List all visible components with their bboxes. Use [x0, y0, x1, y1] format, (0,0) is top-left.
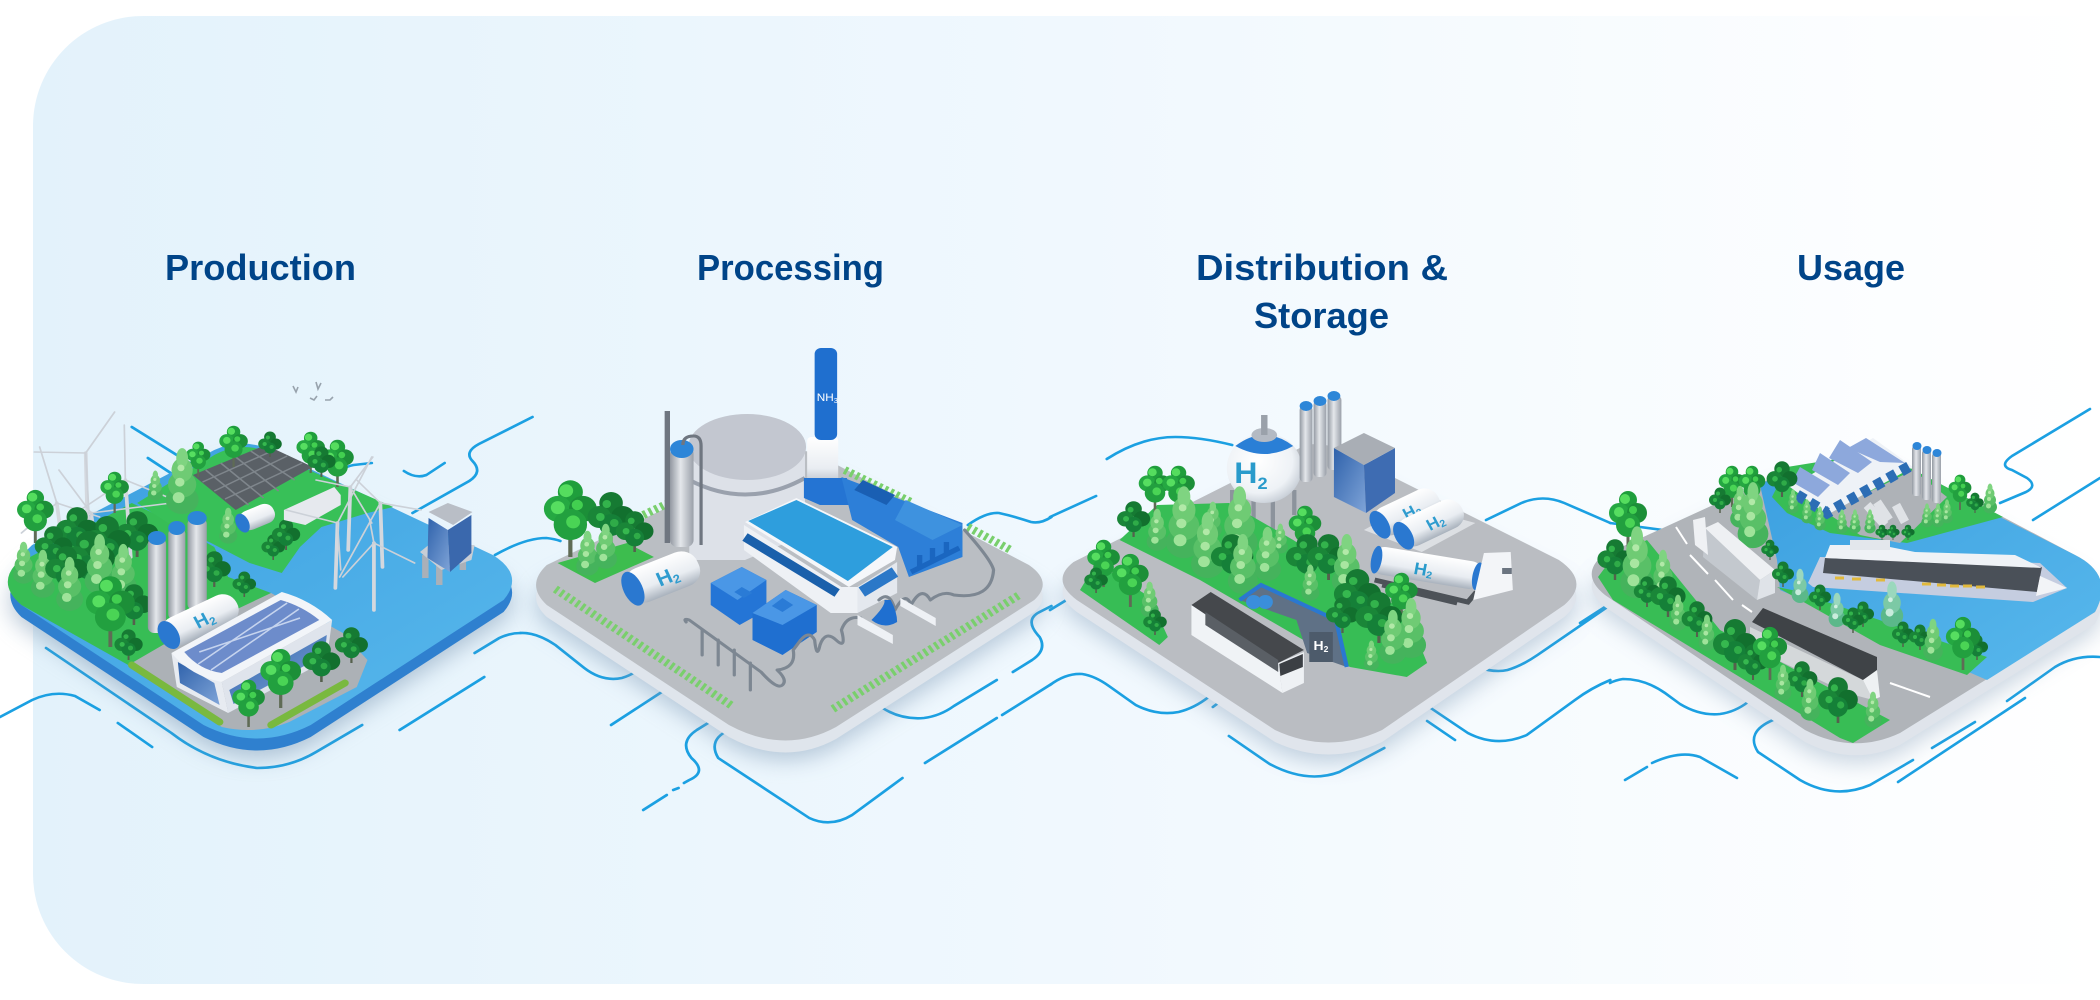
office building — [1334, 433, 1395, 513]
green land — [1120, 503, 1427, 677]
offshore building — [420, 503, 475, 585]
storage pad and tanks: H — [1423, 513, 1443, 534]
fuel station: H — [1314, 638, 1324, 653]
front trees — [1326, 569, 1426, 670]
panel: usage island — [1592, 438, 2100, 763]
storage pad and tanks: 2 — [1415, 507, 1425, 519]
H2 storage tank: H — [190, 608, 212, 632]
H2 sphere: 2 — [1257, 474, 1268, 493]
wind turbines left — [21, 412, 175, 590]
hedges — [132, 665, 345, 725]
water surface — [10, 444, 512, 738]
H2 tank: H — [653, 565, 676, 591]
H2 sphere: H — [1234, 456, 1257, 490]
platform surface — [536, 450, 1043, 741]
left land — [1080, 563, 1168, 645]
storage pad and tanks: 2 — [1438, 518, 1449, 530]
left land — [8, 503, 271, 667]
platform base — [10, 456, 512, 750]
green patch — [557, 543, 654, 583]
forest trees — [1084, 466, 1362, 635]
cruise ship — [1808, 540, 2067, 602]
platform surface — [1063, 444, 1576, 742]
panel: processing island — [536, 348, 1043, 761]
platform base — [1592, 462, 2100, 755]
NH3 tower: NH — [817, 392, 834, 404]
icon: birds — [293, 382, 333, 400]
containers — [1867, 502, 1905, 525]
heading: Processing: Processing — [697, 247, 884, 288]
fuel station — [1240, 585, 1347, 667]
heading: Distribution & Storage: Storage — [1254, 295, 1389, 336]
road surface — [1592, 452, 2100, 743]
water — [1760, 452, 2100, 680]
platform base — [536, 462, 1043, 753]
blue process units — [841, 477, 962, 577]
back land with solar — [137, 447, 393, 573]
H2 sphere — [1227, 415, 1302, 532]
H2 tank — [616, 546, 706, 609]
grass borders — [555, 470, 1019, 709]
panel: distribution and storage island — [1063, 391, 1576, 762]
connecting flow lines — [0, 409, 2100, 822]
electrolyser building — [171, 592, 332, 713]
silos — [1300, 391, 1341, 482]
wind turbines right — [286, 457, 421, 610]
road lines — [1676, 527, 1930, 697]
trees — [13, 426, 354, 660]
storage pad and tanks: H — [1399, 502, 1419, 523]
lower land trees — [1772, 562, 1988, 670]
NH3 tower — [804, 348, 857, 505]
lot trees — [232, 627, 368, 727]
H2 tank: 2 — [671, 571, 683, 586]
tanker truck — [1369, 545, 1513, 603]
factory with solar roof — [1790, 438, 1913, 515]
coach bus — [1750, 608, 1880, 700]
NH3 tower: 3 — [834, 396, 838, 405]
parking lot — [132, 593, 367, 730]
panel: production island — [8, 412, 512, 758]
solar array — [193, 445, 313, 510]
pipe network — [685, 530, 994, 690]
fuel station: 2 — [1324, 644, 1329, 654]
back-left forest — [1709, 466, 1779, 560]
H2 storage tank: 2 — [208, 615, 219, 628]
H2 storage tank — [153, 589, 244, 652]
small tank and container — [232, 487, 341, 535]
lower land — [1777, 587, 1987, 675]
heading: Distribution & Storage: Distribution & — [1196, 247, 1448, 288]
silos — [148, 511, 207, 633]
blue valve — [871, 600, 897, 626]
box truck — [1693, 517, 1775, 600]
left trees — [1597, 491, 1881, 728]
main building — [744, 498, 897, 613]
heading: Production: Production — [165, 247, 356, 288]
platform base — [1063, 456, 1576, 754]
big gas tank — [688, 414, 806, 560]
heading: Usage: Usage — [1797, 247, 1905, 288]
island trees — [1767, 461, 1997, 540]
blue tanks — [711, 567, 817, 655]
stack and column — [665, 411, 701, 547]
factory yard — [1827, 470, 1947, 543]
silos — [1912, 442, 1942, 503]
tanker truck: H — [1412, 559, 1429, 580]
storage pad and tanks — [1364, 484, 1475, 553]
back island — [1772, 452, 2003, 543]
tanker truck: 2 — [1425, 570, 1433, 582]
bus — [1191, 592, 1304, 693]
left land — [1598, 540, 1890, 743]
trees — [544, 480, 653, 576]
